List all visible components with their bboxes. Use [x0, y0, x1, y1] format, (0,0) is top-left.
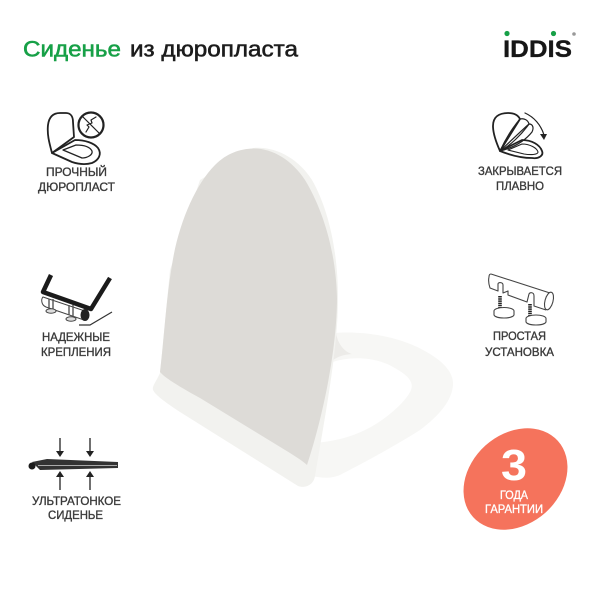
seat ring shading — [330, 333, 352, 363]
lid inner surface — [160, 148, 337, 465]
label: easy installation — [485, 329, 554, 359]
title: из дюропласта — [130, 36, 299, 62]
logo: IDDIS: IDDIS — [503, 36, 572, 63]
icon: reliable hinges — [42, 275, 112, 325]
label: soft close — [478, 164, 562, 193]
title — [23, 36, 299, 62]
icon: ultra-thin seat — [28, 438, 118, 490]
label: easy installation: УСТАНОВКА — [485, 345, 554, 359]
warranty badge — [443, 407, 588, 551]
label: soft close: ПЛАВНО — [496, 179, 544, 193]
label: durable material — [38, 164, 116, 194]
seat ring — [312, 333, 453, 478]
icon: durable material seat — [48, 112, 104, 164]
warranty badge: 3 — [501, 441, 527, 490]
label: reliable hinges — [41, 330, 111, 359]
lid underside rim — [153, 148, 338, 487]
label: durable material: ПРОЧНЫЙ — [46, 164, 107, 179]
warranty badge: ГОДА — [500, 490, 528, 502]
warranty badge: ГАРАНТИИ — [485, 504, 543, 516]
icon: soft close — [493, 113, 547, 158]
arrows — [56, 438, 94, 490]
label: durable material: ДЮРОПЛАСТ — [38, 180, 116, 194]
label: ultra-thin seat: УЛЬТРАТОНКОЕ — [32, 494, 121, 508]
toilet seat product — [153, 148, 453, 487]
label: reliable hinges: КРЕПЛЕНИЯ — [41, 345, 111, 359]
label: easy installation: ПРОСТАЯ — [493, 329, 546, 343]
icon: easy installation — [489, 274, 555, 325]
label: reliable hinges: НАДЕЖНЫЕ — [42, 330, 110, 344]
label: ultra-thin seat — [32, 494, 121, 522]
title: Сиденье — [23, 36, 121, 62]
label: soft close: ЗАКРЫВАЕТСЯ — [478, 164, 562, 178]
label: ultra-thin seat: СИДЕНЬЕ — [48, 508, 103, 522]
